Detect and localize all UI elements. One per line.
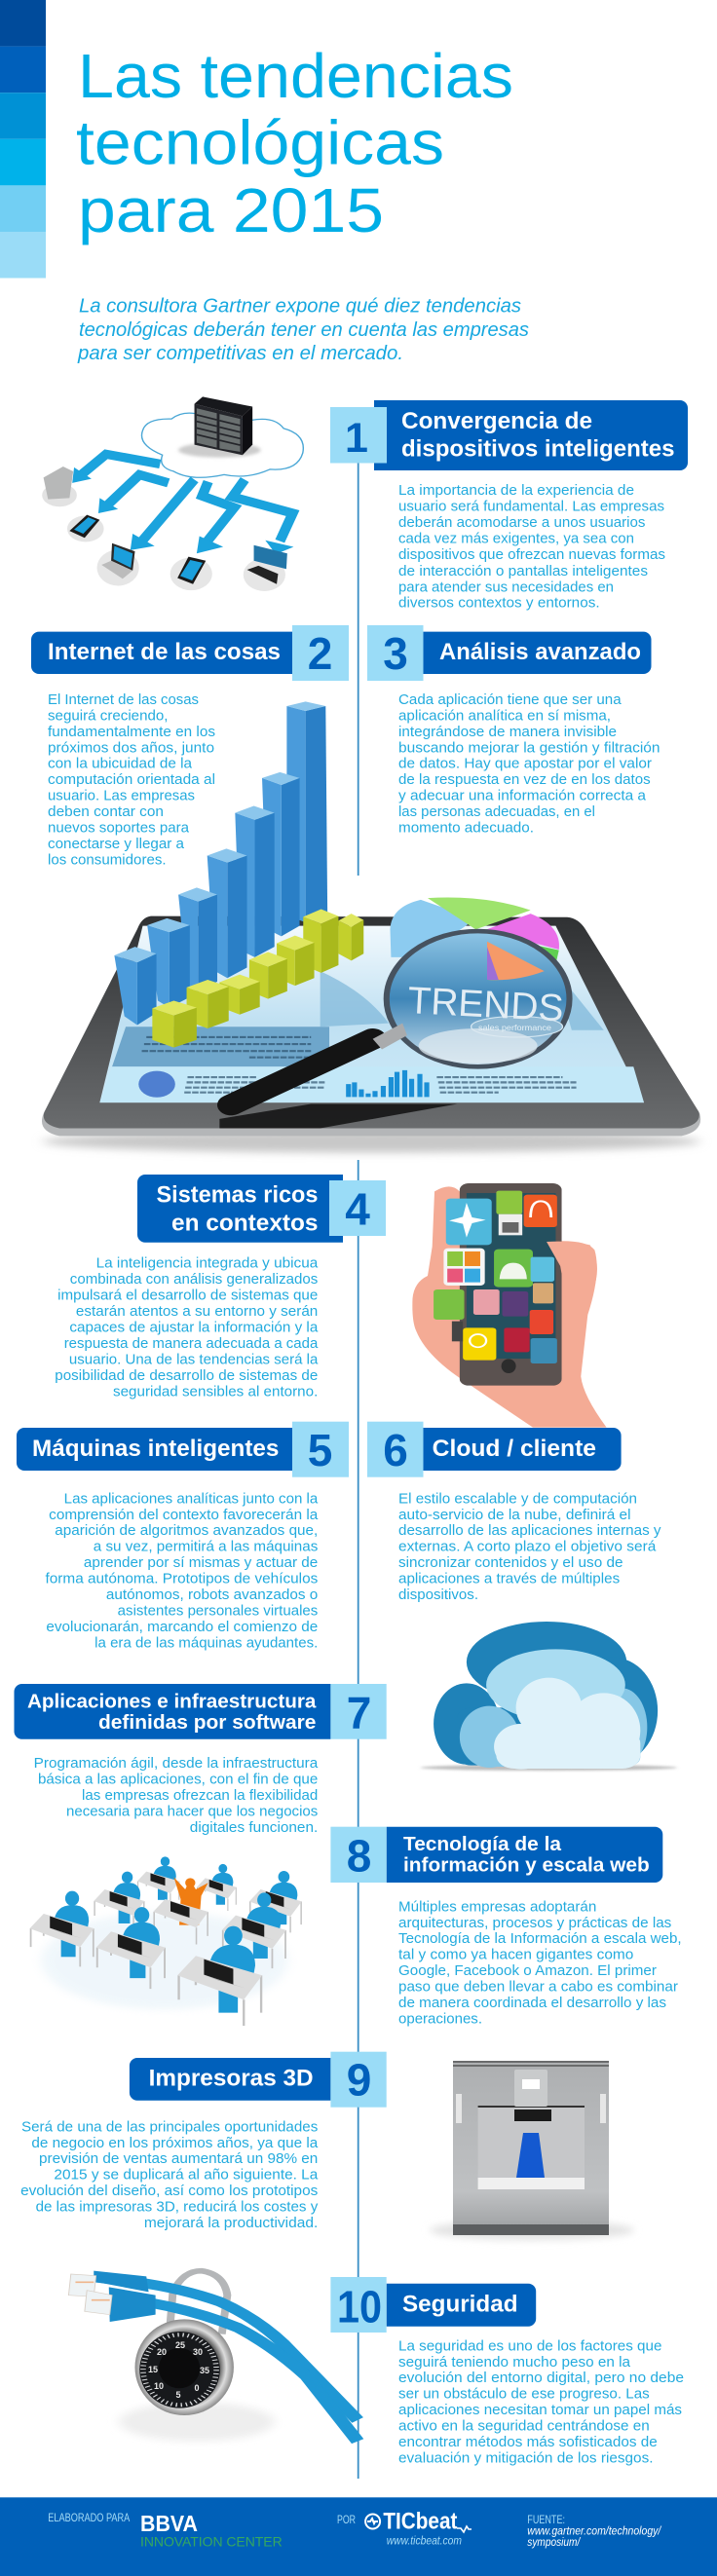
connector boots [94,2271,156,2322]
heading 4: en contextos [171,1210,318,1236]
icon: arrow heads [72,467,293,554]
body text 10: ser un obstáculo de ese progreso. Las [398,2386,650,2403]
icon: router [42,467,77,506]
worker 7 [249,1871,302,1932]
body text 7: necesaria para hacer que los negocios [66,1803,318,1819]
tablet screen [99,926,644,1102]
heading 1: Convergencia de [401,408,592,434]
icon: desktop [244,545,287,591]
body text 3: buscando mejorar la gestión y filtración [398,739,660,756]
worker 8 [222,1892,286,1968]
number 7: 7 [347,1687,371,1737]
number tile 8 [330,1827,387,1883]
heading box 8 [387,1827,662,1883]
body text 9: previsión de ventas aumentará un 98% en [39,2150,318,2167]
printer base [453,2224,609,2235]
logo mark: TICbeat [365,2515,380,2528]
body text 5: evolucionarán, marcando el comienzo de [46,1619,318,1635]
credit label: ELABORADO PARA [48,2511,130,2524]
source label: FUENTE: [527,2513,565,2526]
source link: symposium/ [527,2535,582,2549]
body text 8: tal y como ya hacen gigantes como [398,1947,633,1963]
heading box 6 [423,1428,622,1471]
intro text: La consultora Gartner expone qué diez tendencias [79,296,521,317]
body text 6: dispositivos. [398,1587,478,1603]
heading 7: definidas por software [98,1711,316,1734]
worker 4 [96,1907,166,1989]
body text 4: La inteligencia integrada y ubicua [96,1255,319,1272]
worker 9 [177,1926,262,2026]
title: para 2015 [78,175,384,245]
worker 6 [197,1864,237,1911]
body text 3: de datos. Hay que apostar por el valor [398,756,652,772]
body text 6 [398,1490,661,1603]
screen dark text band [112,1027,329,1066]
front cloud [494,1678,640,1770]
icon: smartphone small [67,515,104,541]
body text 5: a su vez, permitirá a las máquinas [94,1539,318,1555]
body text 3: las personas adecuadas, en el [398,803,595,820]
screen pie [138,1071,175,1098]
middle cloud [460,1688,647,1768]
tablet body [44,916,699,1129]
number 4: 4 [345,1184,370,1235]
body text 1: cada vez más exigentes, ya sea con [398,530,634,546]
intro text [77,296,529,364]
body text 1: diversos contextos y entornos. [398,595,600,612]
heading box 4 [137,1175,343,1243]
heading 5: Máquinas inteligentes [32,1436,279,1462]
body text 6: externas. A corto plazo el objetivo será [398,1539,657,1555]
panel: trend 2 [31,625,349,868]
body text 7: básica a las aplicaciones, con el fin de que [38,1771,318,1788]
body text 2: fundamentalmente en los [48,724,215,740]
body text 9 [20,2118,319,2231]
dial numerals: 25 [175,2340,185,2350]
number tile 4 [329,1180,386,1236]
dial knob [159,2348,200,2388]
dial numerals: 20 [157,2347,167,2357]
heading box 2 [31,632,292,674]
body text 6: auto-servicio de la nube, definirá el [398,1507,631,1523]
panel: trend 7 [14,1684,387,1836]
panel: trend 1 [330,400,688,612]
body text 5: autónomos, robots avanzados o [106,1587,318,1603]
body text 10: encontrar métodos más sofisticados de [398,2434,658,2450]
screen blue streaks [321,968,604,1030]
worker 2 [94,1872,144,1931]
number tile 1 [330,407,387,464]
heading 2: Internet de las cosas [48,639,281,665]
heading box 7 [14,1684,330,1739]
author label: POR [337,2513,356,2526]
illustration: hand holding smartphone with apps [412,1183,607,1428]
logo: innovation center: INNOVATION CENTER [140,2533,283,2549]
body text 2: nuevos soportes para [48,820,190,836]
illustration: cables and combination lock [68,2271,358,2442]
heading 3: Análisis avanzado [439,639,641,665]
illustration: tablet with charts and magnifier [42,701,700,1153]
heading 4 [156,1181,318,1236]
printer shadow [430,2221,634,2240]
body text 10: La seguridad es uno de los factores que [398,2337,661,2354]
icon: network arrows [82,454,292,541]
panel: trend 10 [330,2277,684,2466]
number tile 6 [367,1422,423,1477]
body text 3: integrándose de manera invisible [398,724,617,740]
dial numerals [148,2340,209,2400]
body text 8: Google, Facebook o Amazon. El primer [398,1962,657,1979]
panel: trend 4 [55,1175,386,1400]
dial numerals: 5 [175,2390,181,2400]
number tile 2 [292,625,349,681]
thumb [547,1242,597,1305]
heading 1: dispositivos inteligentes [401,435,674,462]
icon: laptop [97,543,139,585]
body text 5: Las aplicaciones analíticas junto con la [64,1490,319,1507]
logo: BBVA: BBVA [140,2511,198,2536]
body text 9: 2015 y se duplicará al año siguiente. La [54,2167,319,2184]
body text 7: digitales funcionen. [190,1819,318,1836]
intro text: para ser competitivas en el mercado. [77,343,403,364]
heading 7: Aplicaciones e infraestructura [27,1690,317,1712]
body text 2 [48,691,215,868]
body text 3 [398,691,660,836]
body text 9: mejorará la productividad. [144,2215,318,2231]
magnifying glass [373,931,570,1066]
heading box 3 [423,632,651,674]
body text 2: usuario. Las empresas [48,788,195,804]
body text 6: El estilo escalable y de computación [398,1490,637,1507]
number tile 7 [330,1684,387,1739]
icon: cloud [141,413,303,477]
body text 2: próximos dos años, junto [48,739,214,756]
cables [94,2277,358,2420]
RJ45 plugs [68,2274,112,2315]
number tile 5 [292,1422,349,1477]
body text 8: paso que deben llevar a cabo es combinar [398,1979,678,1996]
body text 7: Programación ágil, desde la infraestructura [34,1755,319,1772]
tablet shadow [42,1131,700,1153]
dial numerals: 15 [148,2365,158,2374]
title: Las tendencias [78,41,513,111]
dial numerals: 0 [194,2383,200,2393]
printer side rails [459,2094,603,2123]
dial ticks [143,2334,216,2405]
body text 4: usuario. Una de las tendencias será la [69,1351,319,1367]
printer label [522,2079,540,2089]
panel: trend 9 [20,2052,387,2231]
body text 9: evolución del diseño, así como los prototipos [20,2183,318,2199]
illustration: office workers at desks [30,1856,302,2026]
body text 3: y adecuar una información correcta a [398,788,647,804]
printed model [516,2133,545,2178]
body text 3: de la respuesta en vez de en los datos [398,771,651,788]
body text 7: las empresas ofrezcan la flexibilidad [82,1787,318,1804]
body text 5: comprensión del contexto favorecerán la [49,1507,319,1523]
intro text: tecnológicas deberán tener en cuenta las empresas [79,319,529,341]
phone screen glow [467,1193,555,1359]
body text 10: evolución del entorno digital, pero no debe [398,2370,684,2386]
worker 3 [137,1856,179,1906]
number 10: 10 [337,2281,382,2332]
body text 4: combinada con análisis generalizados [70,1271,318,1288]
yellow bar chart [152,910,363,1048]
body text 5: aprender por sí mismas y actuar de [84,1554,318,1571]
body text 2: El Internet de las cosas [48,691,199,708]
body text 1: deberán acomodarse a unos usuarios [398,514,645,531]
heading box 9 [130,2058,330,2101]
body text 10: evaluación y mitigación de los riesgos. [398,2450,653,2466]
number 2: 2 [308,628,332,679]
heading 6: Cloud / cliente [433,1436,596,1462]
body text 3: momento adecuado. [398,820,534,836]
body text 2: los consumidores. [48,851,167,868]
body text 4 [55,1255,319,1400]
author website: www.ticbeat.com [387,2534,462,2548]
body text 5: la era de las máquinas ayudantes. [94,1634,318,1652]
body text 1: de interacción o pantallas inteligentes [398,563,648,579]
dial numerals: 30 [193,2347,203,2357]
body text 10 [398,2337,684,2466]
body text 4: estarán atentos a su entorno y serán [76,1303,318,1320]
body text 8: Tecnología de la Información a escala web, [398,1930,682,1947]
heading 8: información y escala web [403,1854,650,1877]
heading 8 [403,1833,650,1877]
number tile 10 [330,2277,387,2333]
body text 2: computación orientada al [48,771,215,788]
body text 8: Múltiples empresas adoptarán [398,1898,596,1915]
body text 1: La importancia de la experiencia de [398,482,634,499]
number 6: 6 [383,1425,408,1475]
body text 9: de las impresoras 3D, reducirá los costes y [36,2199,319,2216]
orange worker head [185,1878,195,1887]
number 9: 9 [347,2055,371,2106]
phone [460,1183,562,1386]
body text 2: conectarse y llegar a [48,836,185,852]
body text 10: activo en la seguridad centrándose en [398,2418,650,2435]
number 5: 5 [308,1425,332,1475]
printer top rail [453,2062,609,2066]
body text 5 [45,1490,319,1652]
magnifier handle [231,1039,373,1105]
illustration: cloud network and devices [42,396,303,591]
lens caption: sales performance [478,1023,551,1032]
hand [412,1186,607,1428]
body text 4: capaces de ajustar la información y la [69,1319,319,1336]
body text 4: respuesta de manera adecuada a cada [64,1335,319,1352]
heading box 5 [17,1428,292,1471]
illustration: clouds [421,1622,677,1771]
title [76,41,513,245]
body text 8: de manera coordinada el desarrollo y las [398,1995,666,2011]
body text 2: deben contar con [48,803,164,820]
title: tecnológicas [76,107,444,177]
floor shadow [41,1912,288,2009]
app icons [434,1191,557,1373]
number 3: 3 [383,628,408,679]
central vertical line upper [358,463,359,876]
colour bars [0,0,46,279]
number 8: 8 [347,1831,371,1882]
lens word: TRENDS [407,980,565,1029]
heading 9: Impresoras 3D [149,2066,314,2092]
body text 1: usuario será fundamental. Las empresas [398,498,664,514]
body text 7 [34,1755,319,1836]
body text 5: aparición de algoritmos avanzados que, [55,1522,318,1539]
body text 9: de negocio en los próximos años, ya que la [31,2135,319,2151]
body text 10: seguirá teniendo mucho peso en la [398,2354,631,2371]
printer chamber top edge [478,2106,585,2108]
shackle [170,2271,227,2334]
body text 3: Cada aplicación tiene que ser una [398,691,622,708]
dial numerals: 35 [200,2366,209,2375]
heading 10: Seguridad [402,2291,518,2317]
panel: trend 6 [367,1422,661,1603]
handle shadow [219,1104,458,1129]
icon: smartphone [170,557,212,590]
body text 8: operaciones. [398,2010,482,2028]
body text 8 [398,1898,682,2028]
panel: trend 8 [330,1827,682,2028]
footer band [0,2497,717,2576]
cloud shadow [421,1765,677,1771]
source link [527,2523,662,2549]
bar chart [114,701,327,1025]
body text 10: aplicaciones necesitan tomar un papel más [398,2402,682,2418]
body text 6: desarrollo de las aplicaciones internas y [398,1522,661,1539]
panel: trend 5 [17,1422,349,1652]
panel: trend 3 [367,625,660,836]
body text 3: aplicación analítica en sí misma, [398,707,611,724]
body text 4: posibilidad de desarrollo de sistemas de [55,1367,318,1384]
heading 4: Sistemas ricos [156,1181,318,1208]
print head [514,2109,551,2121]
body text 5: forma autónoma. Prototipos de vehículos [45,1571,318,1587]
icon: server [178,396,261,458]
body text 4: seguridad sensibles al entorno. [113,1383,318,1400]
logo: TICbeat: TICbeat [383,2509,457,2535]
central vertical line lower [358,1160,359,2479]
pie chart [390,897,559,964]
body text 9: Será de una de las principales oportunidades [21,2118,318,2135]
orange worker [173,1877,208,1925]
printer case [453,2061,609,2235]
orange worker desk [153,1899,208,1945]
number 1: 1 [345,415,368,462]
heading 8: Tecnología de la [403,1833,562,1855]
printer top panel [514,2070,547,2107]
body text 2: seguirá creciendo, [48,707,168,724]
body text 1: dispositivos que ofrezcan nuevas formas [398,546,665,563]
screen fake text [142,1037,577,1093]
body text 2: con la ubicuidad de la [48,756,193,772]
body text 8: arquitecturas, procesos y prácticas de las [398,1915,671,1931]
body text 4: impulsará el desarrollo de sistemas que [57,1288,318,1304]
screen bars [349,1070,427,1097]
heading 1 [401,408,674,462]
number tile 3 [367,625,423,681]
heading box 10 [387,2284,536,2327]
body text 6: aplicaciones a través de múltiples [398,1571,620,1587]
body text 5: asistentes personales virtuales [118,1603,318,1620]
body text 1: para atender sus necesidades en [398,579,614,595]
illustration: 3D printer [430,2061,634,2240]
number tile 9 [330,2052,387,2108]
upper middle cloud [486,1649,625,1721]
worker 1 [30,1891,94,1966]
lock dial [135,2319,234,2415]
source link: www.gartner.com/technology/ [527,2523,662,2537]
dial face [139,2332,220,2408]
printer chamber [478,2107,585,2180]
screen light lower band [99,1066,644,1102]
back cloud [434,1622,658,1766]
heading box 1 [374,400,688,470]
body text 1 [398,482,665,612]
heading 7 [27,1690,317,1734]
body text 6: sincronizar contenidos y el uso de [398,1554,623,1571]
tablet base [42,917,700,1136]
logo pulse [457,2526,472,2532]
print bed [478,2178,585,2189]
lock shadow [119,2403,275,2442]
dial numerals: 10 [154,2381,164,2391]
